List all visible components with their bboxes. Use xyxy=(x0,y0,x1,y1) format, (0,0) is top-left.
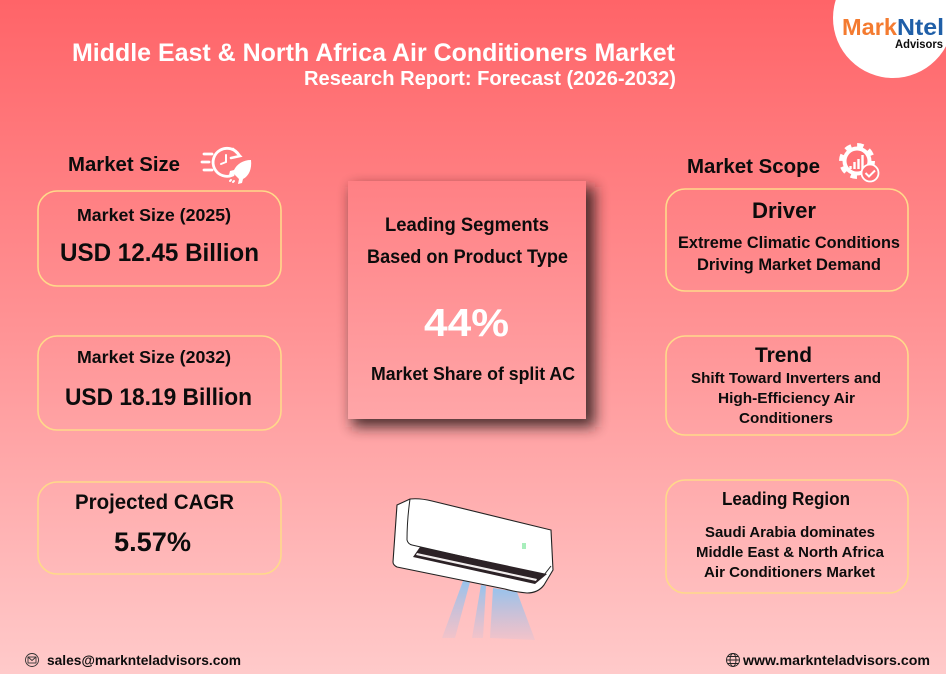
air flow xyxy=(442,581,535,640)
logo badge: Advisors xyxy=(895,39,943,51)
card: market size 2032: USD 18.19 Billion xyxy=(65,384,252,411)
card: trend xyxy=(666,336,908,435)
card: projected CAGR xyxy=(38,482,281,574)
panel: leading segments: Leading Segments xyxy=(385,215,549,236)
card: driver xyxy=(666,189,908,291)
title: Middle East & North Africa Air Conditioners Market xyxy=(72,39,676,67)
card: leading region: Air Conditioners Market xyxy=(704,564,875,581)
card: trend: Shift Toward Inverters and xyxy=(691,370,881,387)
logo badge: Mark xyxy=(842,14,897,40)
card: driver: Driver xyxy=(752,198,816,223)
panel: leading segments xyxy=(348,181,595,427)
card: leading region: Saudi Arabia dominates xyxy=(705,524,875,541)
card: leading region: Middle East & North Africa xyxy=(696,544,885,561)
panel: leading segments: Based on Product Type xyxy=(367,247,568,268)
panel: leading segments: Market Share of split AC xyxy=(371,363,575,384)
card: market size 2032: Market Size (2032) xyxy=(77,347,231,367)
card: leading region: Leading Region xyxy=(722,489,850,509)
card: market size 2025: USD 12.45 Billion xyxy=(60,239,259,267)
icon: gear with chart and check xyxy=(841,145,878,182)
heading: market size: Market Size xyxy=(68,153,180,176)
icon: air conditioner xyxy=(393,499,553,640)
heading: market scope: Market Scope xyxy=(687,155,820,178)
card: trend: High-Efficiency Air xyxy=(718,390,855,407)
footer website: www.marknteladvisors.com xyxy=(742,652,930,668)
card: market size 2025: Market Size (2025) xyxy=(77,205,231,225)
title: Research Report: Forecast (2026-2032) xyxy=(304,68,676,90)
card: leading region xyxy=(666,480,908,593)
icon: clock and rocket xyxy=(202,148,251,184)
logo badge xyxy=(833,0,946,78)
card: market size 2025 xyxy=(38,191,281,286)
card: projected CAGR: 5.57% xyxy=(114,527,191,557)
title xyxy=(72,39,676,90)
panel: leading segments: 44% xyxy=(424,302,509,345)
logo badge: Ntel xyxy=(897,14,944,40)
footer email: sales@marknteladvisors.com xyxy=(47,652,241,668)
card: trend: Conditioners xyxy=(739,410,833,427)
card: trend: Trend xyxy=(755,344,812,367)
card: market size 2032 xyxy=(38,336,281,430)
card: projected CAGR: Projected CAGR xyxy=(75,491,234,514)
card: driver: Driving Market Demand xyxy=(697,256,881,274)
card: driver: Extreme Climatic Conditions xyxy=(678,234,900,252)
